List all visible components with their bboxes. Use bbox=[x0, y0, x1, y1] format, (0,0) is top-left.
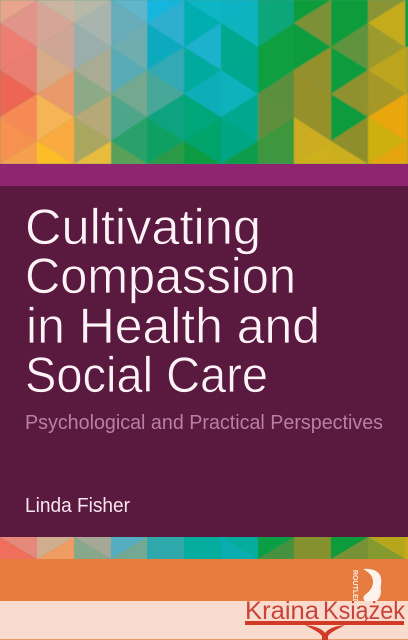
orange band bbox=[0, 559, 408, 601]
title: Compassion bbox=[25, 248, 296, 304]
publisher logo: Routledge: ROUTLEDGE bbox=[351, 570, 360, 614]
mosaic strip bbox=[0, 537, 408, 559]
title bbox=[25, 199, 320, 403]
subtitle: Psychological and Practical Perspectives bbox=[25, 411, 383, 434]
title: in Health and bbox=[26, 298, 320, 354]
watermark: Kraina Książek: Kraina bbox=[245, 597, 319, 625]
title: Cultivating bbox=[25, 199, 261, 255]
title: Social Care bbox=[25, 347, 268, 403]
mosaic panel: coloured triangles bbox=[0, 0, 408, 164]
watermark: Kraina Książek: Książek bbox=[323, 597, 405, 625]
publisher logo: Routledge bbox=[351, 569, 381, 614]
purple band bbox=[0, 164, 408, 186]
author: Linda Fisher bbox=[25, 494, 130, 517]
dark plum title panel bbox=[0, 186, 408, 537]
watermark: Kraina Książek bbox=[245, 597, 405, 640]
watermark panel bbox=[0, 601, 408, 639]
